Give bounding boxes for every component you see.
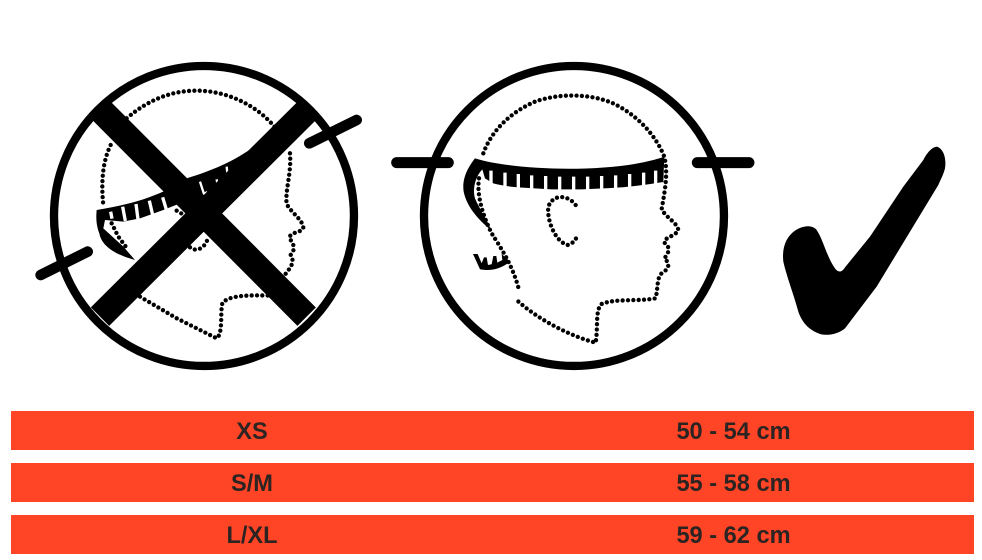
size row: S/M: S/M [231,471,273,497]
cross mark [100,111,307,317]
circle [54,66,354,366]
head outline dotted, right [478,96,678,343]
icon: incorrect tilted measurement [41,66,357,366]
size row: S/M: 55 - 58 cm [676,471,791,497]
tilted tape marker lines [41,120,357,275]
size row: XS [11,411,974,450]
head outline dotted, left [102,91,303,338]
size row: L/XL [11,515,974,554]
measuring tape, tilted [96,112,313,260]
level tape marker lines [397,146,749,179]
icon: correct level measurement [397,66,749,366]
size row: L/XL: L/XL [226,523,278,549]
measuring tape, level [463,157,664,270]
size row: XS: 50 - 54 cm [676,419,791,445]
size row: XS: XS [236,419,268,445]
circle [424,66,724,366]
size row: S/M [11,463,974,502]
icon: check mark [783,147,945,335]
size row: L/XL: 59 - 62 cm [676,523,791,549]
